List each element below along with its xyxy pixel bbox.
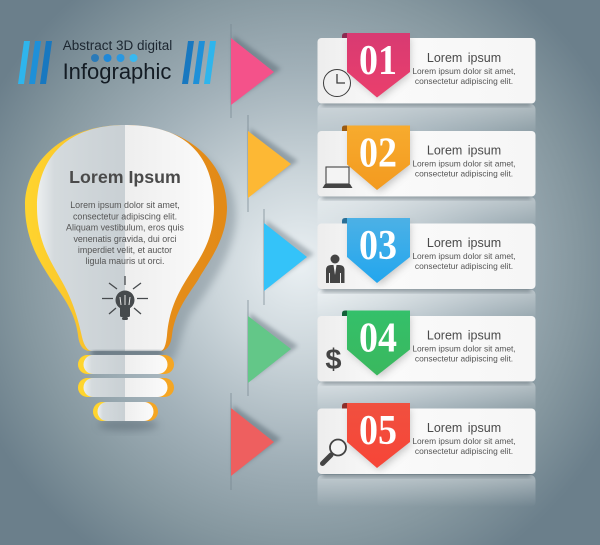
- card 5 panel: [318, 408, 536, 474]
- card 4 heading: Lorem ipsum: [427, 328, 501, 342]
- four blue dots: [91, 54, 138, 62]
- card 1 ribbon: [342, 33, 410, 99]
- bulb coloured paper edge: [25, 125, 227, 351]
- card 1: [318, 33, 536, 136]
- card 2 ribbon: [342, 126, 410, 192]
- card 3 body: Lorem ipsum dolor sit amet,: [412, 251, 516, 261]
- card 1 body: Lorem ipsum dolor sit amet,: [412, 66, 516, 76]
- arrow 2: amber triangle: [248, 115, 298, 212]
- card 1 heading: Lorem ipsum: [427, 51, 501, 65]
- card 4 reflection: [318, 382, 536, 414]
- light bulb: [25, 125, 236, 431]
- bulb heading: Lorem Ipsum: [69, 167, 181, 187]
- card 4 body: Lorem ipsum dolor sit amet,: [412, 344, 516, 354]
- card 5 ribbon: 05: [359, 406, 397, 453]
- card 4 ribbon: [342, 310, 410, 377]
- bulb body text: imperdiet velit, et auctor: [78, 245, 172, 255]
- card 3 body: consectetur adipiscing elit.: [415, 261, 513, 271]
- card 4 body: [412, 344, 516, 364]
- card 1 ribbon: 01: [359, 36, 397, 83]
- icon: clock: [324, 70, 350, 96]
- card 5 body: [412, 436, 516, 456]
- card 2 panel: [318, 131, 536, 196]
- bulb drop shadow: [90, 135, 236, 362]
- card 3 panel: [318, 224, 536, 289]
- card 3 reflection: [318, 290, 536, 322]
- card 5 body: consectetur adipiscing elit.: [415, 446, 513, 456]
- heading: Abstract 3D digital: Abstract 3D digital: [63, 38, 172, 53]
- card 2 body: Lorem ipsum dolor sit amet,: [412, 158, 516, 168]
- card 3 ribbon: [342, 218, 410, 285]
- card 2 shadow: [322, 194, 531, 199]
- card 3 body: [412, 251, 516, 271]
- card 5 shadow: [322, 472, 531, 477]
- arrow 3: blue triangle: [264, 209, 314, 305]
- card 4: [318, 310, 536, 414]
- bulb body text: consectetur adipiscing elit.: [73, 212, 177, 222]
- card 5 reflection: [318, 475, 536, 507]
- header: title block: [18, 38, 216, 84]
- card 5 heading: Lorem ipsum: [427, 421, 501, 435]
- card 3: [318, 218, 536, 322]
- bulb body text: [66, 200, 185, 266]
- card 4 ribbon: 04: [359, 314, 397, 361]
- icon: magnifying glass: [322, 440, 346, 464]
- bulb body text: Lorem ipsum dolor sit amet,: [70, 200, 180, 210]
- left blue slashes: [18, 41, 52, 84]
- card 3 heading: Lorem ipsum: [427, 236, 501, 250]
- card 2 heading: Lorem ipsum: [427, 144, 501, 158]
- base ring 2: [78, 378, 174, 397]
- icon: small light bulb with rays: [102, 276, 148, 320]
- card 2 reflection: [318, 197, 536, 229]
- card 5 ribbon: [342, 403, 410, 470]
- bulb body text: Aliquam vestibulum, eros quis: [66, 222, 185, 232]
- card 5: [318, 403, 536, 507]
- arrow 5: red triangle: [231, 393, 281, 490]
- card 1 shadow: [322, 101, 531, 106]
- card 3 ribbon: 03: [359, 221, 397, 268]
- heading: Infographic: Infographic: [63, 59, 171, 84]
- icon: businessman: [326, 254, 344, 283]
- card 2 body: consectetur adipiscing elit.: [415, 168, 513, 178]
- bulb body text: venenatis gravida, dui orci: [73, 234, 177, 244]
- right blue slashes: [182, 41, 216, 84]
- icon: laptop: [322, 167, 352, 188]
- card 1 panel: [318, 38, 536, 104]
- base ring 1: [78, 355, 174, 374]
- base ring 3: [93, 402, 158, 431]
- card 1 body: [412, 66, 516, 86]
- card 1 reflection: [318, 104, 536, 136]
- card 2 ribbon: 02: [359, 129, 397, 176]
- card 2: [318, 126, 536, 229]
- card 3 shadow: [322, 287, 531, 292]
- shadow under bulb: [92, 351, 162, 355]
- bulb white paper, left half: [37, 125, 125, 351]
- icon: dollar sign: $: [325, 344, 342, 376]
- bulb white paper, right half: [125, 125, 214, 351]
- bulb body text: ligula mauris ut orci.: [86, 256, 164, 266]
- card 4 panel: [318, 316, 536, 382]
- card 1 body: consectetur adipiscing elit.: [415, 76, 513, 86]
- card 5 body: Lorem ipsum dolor sit amet,: [412, 436, 516, 446]
- arrow 1: pink triangle: [231, 24, 281, 118]
- card 4 body: consectetur adipiscing elit.: [415, 354, 513, 364]
- card 2 body: [412, 158, 516, 178]
- arrow 4: green triangle: [248, 300, 298, 396]
- card 4 shadow: [322, 379, 531, 384]
